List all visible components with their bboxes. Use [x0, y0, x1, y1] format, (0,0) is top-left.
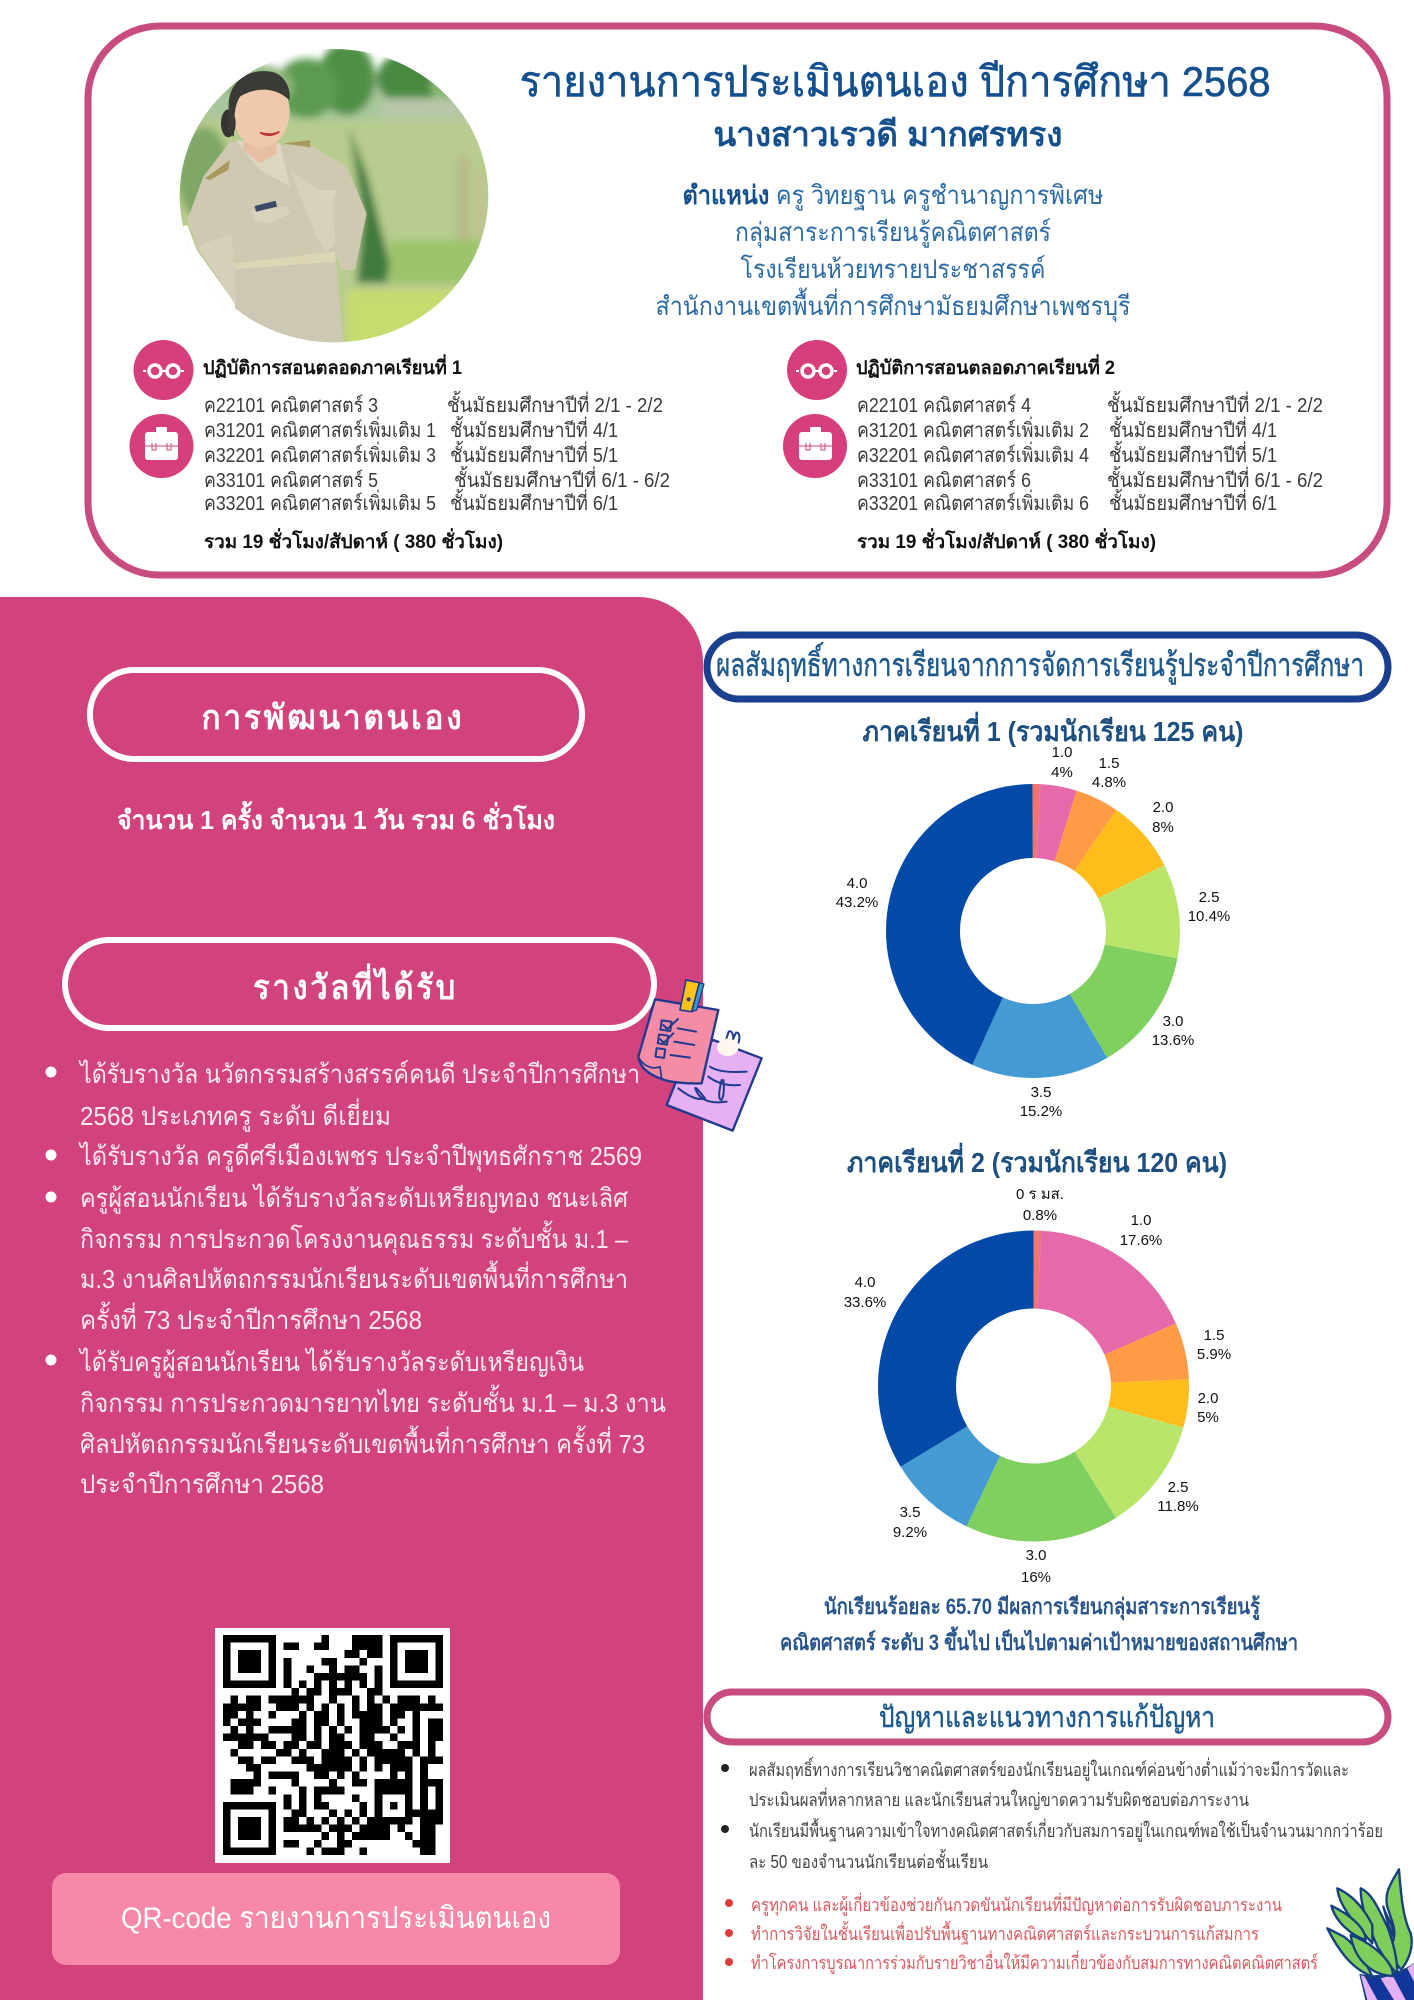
awards list: ครูผู้สอนนักเรียน ได้รับรางวัลระดับเหรียญทอง ชนะเลิศ — [80, 1183, 628, 1214]
semester 2 teaching load: ปฏิบัติการสอนตลอดภาคเรียนที่ 2 — [856, 354, 1115, 379]
panel: teacher profile card — [88, 26, 1387, 575]
self development summary: จำนวน 1 ครั้ง จำนวน 1 วัน รวม 6 ชั่วโมง — [117, 800, 555, 835]
donut chart: semester 1: 4% — [1051, 764, 1073, 781]
donut chart: semester 2: 2.0 — [1198, 1390, 1218, 1407]
donut chart: semester 2: 0.8% — [1023, 1207, 1057, 1224]
QR code caption button — [52, 1873, 620, 1965]
outcome summary — [780, 1594, 1298, 1655]
donut chart: semester 1: 8% — [1152, 819, 1174, 836]
semester 1 teaching load: ชั้นมัธยมศึกษาปีที่ 4/1 — [450, 416, 618, 442]
donut chart: semester 2: 2.5 — [1168, 1479, 1188, 1496]
awards list: ครั้งที่ 73 ประจำปีการศึกษา 2568 — [80, 1301, 422, 1335]
donut chart: semester 2: 4.0 — [855, 1274, 875, 1291]
teacher name: นางสาวเรวดี มากศรทรง — [714, 116, 1062, 154]
position details: ตำแหน่ง ครู วิทยฐาน ครูชำนาญการพิเศษ — [682, 180, 1104, 211]
awards list: ประจำปีการศึกษา 2568 — [80, 1469, 324, 1499]
heading: problems and solutions: ปัญหาและแนวทางการแก้ปัญหา — [879, 1702, 1215, 1734]
semester 2 teaching load: ชั้นมัธยมศึกษาปีที่ 6/1 — [1109, 489, 1277, 515]
awards list: ได้รับรางวัล นวัตกรรมสร้างสรรค์คนดี ประจำปีการศึกษา — [78, 1059, 640, 1089]
donut chart: semester 1: 15.2% — [1020, 1103, 1062, 1120]
icon: glasses semester 1 — [134, 340, 194, 400]
QR code caption button: QR-code รายงานการประเมินตนเอง — [121, 1902, 551, 1935]
donut chart: semester 2: 11.8% — [1157, 1498, 1199, 1515]
semester 1 teaching load: ค22101 คณิตศาสตร์ 3 — [204, 394, 378, 417]
donut chart: semester 2: 0 ร มส. — [1016, 1186, 1064, 1203]
panel: learning outcomes — [707, 635, 1388, 1655]
donut chart: semester 2: 16% — [1021, 1569, 1051, 1586]
donut chart: semester 2: 3.5 — [900, 1504, 920, 1521]
semester 1 teaching load: ปฏิบัติการสอนตลอดภาคเรียนที่ 1 — [203, 354, 462, 379]
icon: bag semester 1 — [130, 414, 194, 478]
problems list: ละ 50 ของจำนวนนักเรียนต่อชั้นเรียน — [749, 1849, 988, 1872]
donut chart: semester 1: 10.4% — [1188, 908, 1230, 925]
semester 2 teaching load: รวม 19 ชั่วโมง/สัปดาห์ ( 380 ชั่วโมง) — [857, 528, 1156, 553]
semester 1 teaching load: ชั้นมัธยมศึกษาปีที่ 5/1 — [450, 441, 618, 467]
teacher photo — [180, 49, 488, 342]
awards list: กิจกรรม การประกวดโครงงานคุณธรรม ระดับชั้น ม.1 – — [80, 1220, 628, 1255]
icon: potted plant — [1327, 1869, 1414, 2000]
awards list: ศิลปหัตถกรรมนักเรียนระดับเขตพื้นที่การศึกษา ครั้งที่ 73 — [80, 1425, 645, 1459]
icon: glasses semester 2 — [787, 340, 847, 400]
semester 2 teaching load: ชั้นมัธยมศึกษาปีที่ 2/1 - 2/2 — [1107, 391, 1323, 417]
awards list: กิจกรรม การประกวดมารยาทไทย ระดับชั้น ม.1 – ม.3 งาน — [80, 1384, 666, 1418]
donut chart: semester 1: 4.8% — [1092, 774, 1126, 791]
semester 2 teaching load: ค32201 คณิตศาสตร์เพิ่มเติม 4 — [857, 441, 1089, 467]
donut chart: semester 1: 4.0 — [847, 875, 867, 892]
donut chart: semester 1: 1.5 — [1099, 755, 1119, 772]
semester 2 teaching load: ค22101 คณิตศาสตร์ 4 — [857, 394, 1031, 417]
donut chart: semester 1: 2.5 — [1199, 889, 1219, 906]
donut chart: semester 1: 3.5 — [1031, 1084, 1051, 1101]
position details: สำนักงานเขตพื้นที่การศึกษามัธยมศึกษาเพชรบุรี — [656, 287, 1131, 322]
semester 2 teaching load: ชั้นมัธยมศึกษาปีที่ 4/1 — [1109, 416, 1277, 442]
donut chart: semester 1: 43.2% — [836, 894, 878, 911]
donut chart: semester 2: 5.9% — [1197, 1346, 1231, 1363]
semester 2 teaching load: ค33101 คณิตศาสตร์ 6 — [857, 469, 1031, 492]
awards list: ได้รับรางวัล ครูดีศรีเมืองเพชร ประจำปีพุทธศักราช 2569 — [78, 1141, 642, 1172]
heading: problems and solutions — [707, 1692, 1388, 1742]
position details: กลุ่มสาระการเรียนรู้คณิตศาสตร์ — [735, 217, 1051, 248]
donut chart: semester 2: 33.6% — [844, 1294, 886, 1311]
problems list: ประเมินผลที่หลากหลาย และนักเรียนส่วนใหญ่ขาดความรับผิดชอบต่อภาระงาน — [749, 1787, 1249, 1810]
title: รายงานการประเมินตนเอง ปีการศึกษา 2568 — [520, 58, 1270, 105]
donut chart: semester 1: 3.0 — [1163, 1013, 1183, 1030]
donut chart: semester 2: 3.0 — [1026, 1547, 1046, 1564]
donut chart: semester 2: 9.2% — [893, 1524, 927, 1541]
solutions list — [725, 1892, 1318, 1974]
panel: self development and awards — [0, 597, 703, 2000]
semester 1 teaching load: ค33101 คณิตศาสตร์ 5 — [204, 469, 378, 492]
semester 2 title: ภาคเรียนที่ 2 (รวมนักเรียน 120 คน) — [847, 1142, 1227, 1178]
semester 2 teaching load: ค33201 คณิตศาสตร์เพิ่มเติม 6 — [857, 489, 1089, 515]
donut chart: semester 1: 13.6% — [1152, 1032, 1194, 1049]
donut chart: semester 1: 1.0 — [1052, 744, 1072, 761]
problems list — [721, 1756, 1383, 1872]
semester 1 teaching load: ค31201 คณิตศาสตร์เพิ่มเติม 1 — [204, 416, 436, 442]
heading: self development — [90, 670, 582, 759]
donut chart: semester 2: 1.0 — [1131, 1212, 1151, 1229]
donut chart: semester 2: 5% — [1197, 1409, 1219, 1426]
donut chart: semester 2 — [844, 1186, 1231, 1586]
heading: awards — [65, 940, 654, 1028]
outcome summary: คณิตศาสตร์ ระดับ 3 ขึ้นไป เป็นไปตามค่าเป้าหมายของสถานศึกษา — [780, 1626, 1298, 1655]
awards list: ได้รับครูผู้สอนนักเรียน ได้รับรางวัลระดับเหรียญเงิน — [78, 1347, 584, 1378]
donut chart: semester 1: 2.0 — [1153, 799, 1173, 816]
icon: sticky notes — [638, 980, 762, 1131]
semester 2 teaching load: ค31201 คณิตศาสตร์เพิ่มเติม 2 — [857, 416, 1089, 442]
semester 1 teaching load: ชั้นมัธยมศึกษาปีที่ 2/1 - 2/2 — [447, 391, 663, 417]
heading: self development: การพัฒนาตนเอง — [202, 699, 464, 737]
semester 1 teaching load — [203, 354, 670, 553]
semester 1 teaching load: ชั้นมัธยมศึกษาปีที่ 6/1 — [450, 489, 618, 515]
solutions list: ครูทุกคน และผู้เกี่ยวข้องช่วยกันกวดขันนักเรียนที่มีปัญหาต่อการรับผิดชอบภาระงาน — [751, 1892, 1282, 1916]
semester 2 teaching load — [856, 354, 1323, 553]
semester 2 teaching load: ชั้นมัธยมศึกษาปีที่ 6/1 - 6/2 — [1107, 466, 1323, 492]
awards list: 2568 ประเภทครู ระดับ ดีเยี่ยม — [80, 1098, 391, 1132]
semester 1 teaching load: ค33201 คณิตศาสตร์เพิ่มเติม 5 — [204, 489, 436, 515]
heading: learning outcomes — [707, 635, 1388, 699]
QR code — [215, 1628, 450, 1863]
donut chart: semester 2: 1.5 — [1204, 1327, 1224, 1344]
position details: โรงเรียนห้วยทรายประชาสรรค์ — [740, 254, 1046, 284]
position details — [656, 180, 1131, 322]
outcome summary: นักเรียนร้อยละ 65.70 มีผลการเรียนกลุ่มสาระการเรียนรู้ — [824, 1594, 1260, 1621]
solutions list: ทำการวิจัยในชั้นเรียนเพื่อปรับพื้นฐานทางคณิตศาสตร์และกระบวนการแก้สมการ — [751, 1921, 1259, 1945]
awards list — [46, 1059, 666, 1499]
semester 2 teaching load: ชั้นมัธยมศึกษาปีที่ 5/1 — [1109, 441, 1277, 467]
heading: awards: รางวัลที่ได้รับ — [253, 963, 458, 1007]
donut chart: semester 1 — [836, 744, 1230, 1120]
semester 1 title: ภาคเรียนที่ 1 (รวมนักเรียน 125 คน) — [862, 711, 1244, 747]
awards list: ม.3 งานศิลปหัตถกรรมนักเรียนระดับเขตพื้นที่การศึกษา — [80, 1260, 628, 1294]
semester 1 teaching load: รวม 19 ชั่วโมง/สัปดาห์ ( 380 ชั่วโมง) — [204, 528, 503, 553]
panel: problems and solutions — [707, 1692, 1414, 2000]
semester 1 teaching load: ค32201 คณิตศาสตร์เพิ่มเติม 3 — [204, 441, 436, 467]
semester 1 teaching load: ชั้นมัธยมศึกษาปีที่ 6/1 - 6/2 — [454, 466, 670, 492]
icon: bag semester 2 — [783, 414, 847, 478]
donut chart: semester 2: 17.6% — [1120, 1232, 1162, 1249]
